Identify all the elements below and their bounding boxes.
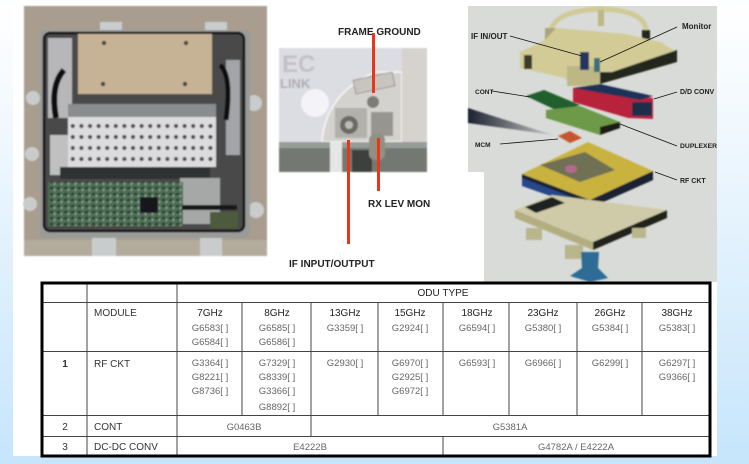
module part numbers: G5380[ ] bbox=[525, 323, 561, 334]
module part numbers: G6970[ ] bbox=[392, 358, 428, 369]
caution label bbox=[353, 72, 395, 94]
module part numbers: G7329[ ] bbox=[259, 358, 295, 369]
module part numbers: G6586[ ] bbox=[259, 337, 295, 348]
row labels: 3 bbox=[62, 442, 68, 453]
callout: frame ground bbox=[338, 27, 421, 93]
ground screw bbox=[367, 96, 379, 108]
row labels: DC-DC CONV bbox=[94, 442, 158, 453]
IF and monitor connectors bbox=[580, 52, 589, 70]
monitor cover bbox=[550, 9, 646, 38]
module part numbers: G2930[ ] bbox=[327, 358, 363, 369]
exploded view labels: DUPLEXER bbox=[680, 143, 717, 150]
duplexer block bbox=[546, 106, 620, 135]
RF circuit module bbox=[522, 142, 653, 200]
module part numbers: G6594[ ] bbox=[459, 323, 495, 334]
enclosure mounting lugs bbox=[23, 22, 264, 256]
frequency headings: 38GHz bbox=[661, 308, 693, 319]
module part numbers bbox=[192, 323, 695, 453]
enclosure body bbox=[40, 30, 250, 238]
RX LEV MON connector bbox=[371, 112, 393, 136]
module part numbers: G6299[ ] bbox=[592, 358, 628, 369]
row labels: 1 bbox=[62, 359, 68, 370]
module part numbers: G6297[ ] bbox=[659, 358, 695, 369]
module part numbers: G2925[ ] bbox=[392, 372, 428, 383]
D/D converter block bbox=[573, 88, 653, 119]
photo: connector panel bbox=[279, 48, 427, 172]
module part numbers: G3359[ ] bbox=[327, 323, 363, 334]
module part numbers: G3366[ ] bbox=[259, 386, 295, 397]
frequency headings: 7GHz bbox=[197, 308, 223, 319]
controller card bbox=[526, 90, 580, 112]
module part numbers: G6972[ ] bbox=[392, 386, 428, 397]
row labels: MODULE bbox=[94, 308, 137, 319]
table header: ODU TYPE bbox=[418, 288, 469, 299]
callout: RX LEV MON bbox=[368, 138, 430, 210]
module part numbers: G6966[ ] bbox=[525, 358, 561, 369]
module part numbers: G8339[ ] bbox=[259, 372, 295, 383]
exploded view labels: RF CKT bbox=[680, 178, 706, 185]
module part numbers: G5384[ ] bbox=[592, 323, 628, 334]
module part numbers: G6584[ ] bbox=[192, 337, 228, 348]
exploded view labels: IF IN/OUT bbox=[471, 32, 508, 41]
left and right cables bbox=[48, 38, 72, 118]
photo: connector panel: LINK bbox=[280, 76, 311, 91]
module part numbers: G8892[ ] bbox=[259, 402, 295, 413]
photo: exploded view bbox=[468, 6, 717, 282]
MCM shading wedge bbox=[468, 108, 553, 135]
lid plate bbox=[78, 34, 212, 94]
pole mount bbox=[570, 252, 608, 282]
module part numbers: G8221[ ] bbox=[192, 372, 228, 383]
module part numbers: G6583[ ] bbox=[192, 323, 228, 334]
connector panel plate bbox=[322, 72, 402, 142]
module part numbers: G0463B bbox=[227, 422, 261, 433]
base enclosure bbox=[515, 195, 667, 242]
module part numbers: G4782A / E4222A bbox=[538, 442, 615, 453]
frequency headings: 18GHz bbox=[461, 308, 493, 319]
callout: IF input/output: IF INPUT/OUTPUT bbox=[289, 259, 375, 270]
frequency headings: 15GHz bbox=[394, 308, 426, 319]
MCM chip bbox=[558, 131, 582, 143]
module part numbers: E4222B bbox=[293, 442, 327, 453]
module part numbers: G5381A bbox=[493, 422, 528, 433]
frequency headings: 23GHz bbox=[527, 308, 559, 319]
exploded view labels: D/D CONV bbox=[680, 89, 715, 96]
module part numbers: G3364[ ] bbox=[192, 358, 228, 369]
table: ODU type modules bbox=[42, 282, 710, 456]
shield plate with screws bbox=[68, 104, 216, 118]
callout: IF input/output bbox=[289, 140, 375, 270]
frequency headings: 26GHz bbox=[594, 308, 626, 319]
row labels: RF CKT bbox=[94, 359, 130, 370]
photo: open ODU enclosure bbox=[23, 6, 267, 256]
faded logo letters: EC bbox=[282, 51, 315, 78]
exploded view labels: MCM bbox=[475, 142, 491, 149]
module part numbers: G6585[ ] bbox=[259, 323, 295, 334]
circuit board bbox=[48, 182, 183, 226]
exploded view labels: Monitor bbox=[682, 22, 711, 31]
module part numbers: G8736[ ] bbox=[192, 386, 228, 397]
IF connector bbox=[335, 108, 367, 138]
frequency headings: 13GHz bbox=[329, 308, 361, 319]
callout: RX LEV MON: RX LEV MON bbox=[368, 199, 430, 210]
module part numbers: G5383[ ] bbox=[659, 323, 695, 334]
row labels: CONT bbox=[94, 422, 122, 433]
exploded view labels bbox=[471, 22, 717, 185]
frequency headings bbox=[197, 308, 693, 319]
frequency headings: 8GHz bbox=[264, 308, 290, 319]
module part numbers: G6593[ ] bbox=[459, 358, 495, 369]
module part numbers: G9366[ ] bbox=[659, 372, 695, 383]
callout: frame ground: FRAME GROUND bbox=[338, 27, 421, 38]
row labels bbox=[62, 308, 158, 453]
exploded view labels: CONT bbox=[475, 89, 493, 96]
leader lines bbox=[492, 27, 677, 180]
row labels: 2 bbox=[62, 422, 68, 433]
module part numbers: G2924[ ] bbox=[392, 323, 428, 334]
